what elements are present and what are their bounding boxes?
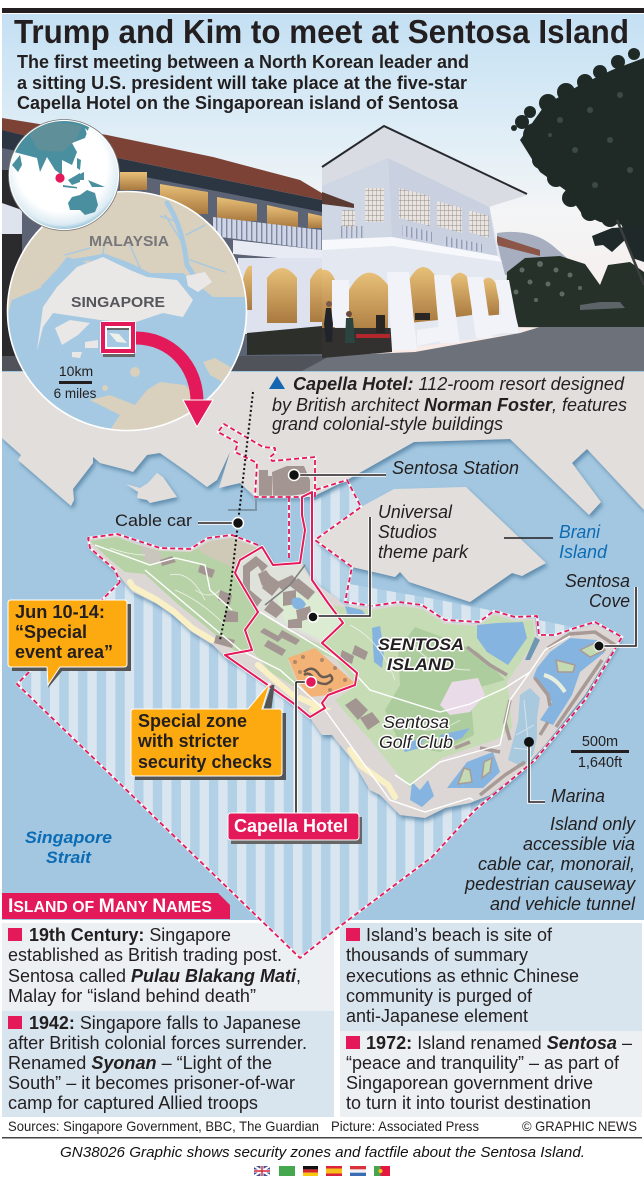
central golf dark green bbox=[385, 627, 505, 752]
panel: factfile 1942: South” – it becomes prisoner-of-war bbox=[8, 1072, 295, 1093]
Sentosa island bbox=[88, 535, 620, 818]
label: Cable car bbox=[115, 511, 244, 530]
title: Trump and Kim to meet at Sentosa Island bbox=[14, 13, 629, 50]
land masses bbox=[2, 372, 644, 602]
inlet bbox=[525, 637, 540, 660]
Capella Hotel description: Capella Hotel: 112-room resort designed bbox=[293, 374, 625, 394]
estate rows bbox=[455, 632, 615, 795]
tree canopy bbox=[511, 48, 644, 232]
label: Brani Island bbox=[504, 522, 608, 562]
west green bbox=[90, 537, 258, 652]
note: island access bbox=[464, 814, 636, 914]
label: Universal Studios: Studios bbox=[378, 522, 437, 542]
subtitle: Capella Hotel on the Singaporean island of Sentosa bbox=[17, 92, 459, 113]
label: Brani Island: Island bbox=[559, 542, 608, 562]
panel: factfile 1972: 1972: Island renamed Sentosa – bbox=[366, 1032, 633, 1053]
left small roof bbox=[322, 192, 354, 208]
subtitle: a sitting U.S. president will take place at the five-star bbox=[17, 72, 467, 93]
cable car line bbox=[220, 392, 253, 640]
callout: special event area: “Special bbox=[15, 622, 87, 642]
mainland Singapore bbox=[2, 372, 644, 515]
label: Marina bbox=[524, 737, 605, 806]
note: island access: and vehicle tunnel bbox=[490, 894, 636, 914]
label: Sentosa Island: SENTOSA bbox=[378, 635, 464, 654]
interior detail bbox=[376, 313, 430, 333]
upper railing lines bbox=[340, 225, 482, 252]
scale bar: island bbox=[571, 734, 629, 771]
panel: factfile 19th century: established as British trading post. bbox=[8, 944, 282, 965]
left wing columns and arches bbox=[238, 258, 322, 334]
location dot bbox=[55, 173, 65, 183]
label: Sentosa Cove: Cove bbox=[589, 591, 630, 611]
Malaysia land bbox=[8, 192, 245, 312]
panel: factfile 1942: after British colonial forces surrender. bbox=[8, 1032, 307, 1053]
label: Capella Hotel bbox=[228, 676, 362, 844]
trunk bbox=[617, 220, 644, 285]
left wing balustrade bbox=[2, 203, 322, 262]
panel: factfile beach executions: community is purged of bbox=[346, 985, 533, 1006]
special event area boundary bbox=[17, 424, 622, 958]
Johor strait and rivers bbox=[43, 203, 225, 287]
callout: special event area: event area” bbox=[15, 642, 113, 662]
left white margin bbox=[0, 0, 2, 1191]
sources bbox=[8, 1118, 637, 1134]
note: island access: cable car, monorail, bbox=[478, 854, 635, 874]
people bbox=[324, 301, 355, 343]
orange resort bbox=[288, 648, 357, 697]
label: Universal Studios: Universal bbox=[378, 502, 453, 522]
Capella Hotel description: grand colonial-style buildings bbox=[272, 414, 503, 434]
red carpet bbox=[356, 334, 390, 338]
scale bar: island: 500m bbox=[582, 734, 618, 750]
special event area stripes bbox=[17, 480, 622, 958]
label: Sentosa Station bbox=[288, 458, 519, 480]
label: Sentosa Island bbox=[378, 635, 464, 674]
east green bbox=[322, 605, 535, 788]
leaf speckle bbox=[548, 92, 633, 188]
island base bbox=[88, 535, 620, 818]
label: Brani Island: Brani bbox=[559, 522, 601, 542]
locator map: Singapore bbox=[0, 180, 250, 431]
roads bbox=[95, 545, 570, 812]
panel: factfile 1942: Renamed Syonan – “Light of the bbox=[8, 1052, 272, 1073]
label: Universal Studios bbox=[308, 502, 469, 622]
VivoCity buildings bbox=[259, 466, 310, 496]
panel: factfile 19th century: 19th Century: Singapore bbox=[29, 924, 231, 945]
ground bbox=[302, 327, 644, 371]
Singapore land bbox=[37, 257, 193, 350]
small island bbox=[126, 473, 177, 503]
lilac area bbox=[440, 678, 485, 715]
subtitle bbox=[17, 51, 469, 113]
panel: factfile beach executions: executions as ethnic Chinese bbox=[346, 965, 579, 986]
caption: GN38026 Graphic shows security zones and factfile about the Sentosa Island. bbox=[60, 1144, 585, 1161]
panel: factfile beach executions: Island’s beach is site of bbox=[366, 924, 553, 945]
sources: © GRAPHIC NEWS bbox=[522, 1118, 637, 1134]
main block roof bbox=[322, 126, 527, 207]
cable road bbox=[265, 565, 305, 605]
left wing wall bbox=[2, 130, 322, 356]
panel: factfile 1942: camp for captured Allied troops bbox=[8, 1092, 258, 1113]
cove islands bbox=[458, 642, 605, 784]
panel: factfile beach executions: thousands of summary bbox=[346, 944, 529, 965]
sources: Picture: Associated Press bbox=[331, 1118, 479, 1134]
callout: special event area: Jun 10-14: bbox=[15, 602, 105, 622]
panel: factfile 1972 bbox=[340, 1031, 642, 1117]
label: Sentosa Golf Club bbox=[379, 712, 453, 752]
label: Singapore Strait: Strait bbox=[46, 848, 92, 867]
subtitle: The first meeting between a North Korean leader and bbox=[17, 51, 469, 72]
label: Universal Studios: theme park bbox=[378, 542, 469, 562]
callout: special zone: security checks bbox=[138, 752, 272, 772]
panel: factfile 19th century: Sentosa called Pulau Blakang Mati, bbox=[8, 965, 301, 986]
panel: factfile beach executions: anti-Japanese element bbox=[346, 1005, 528, 1026]
map water bbox=[2, 371, 644, 920]
zone interior light bbox=[235, 550, 343, 643]
note: island access: Island only bbox=[550, 814, 636, 834]
callout: special zone: with stricter bbox=[137, 731, 239, 751]
lakes bbox=[292, 597, 605, 807]
left wing windows bbox=[120, 172, 322, 228]
scale bar: 10km bbox=[59, 363, 93, 379]
north tan area bbox=[197, 538, 255, 573]
marina bbox=[508, 688, 540, 767]
panel: factfile 1972: Singaporean government drive bbox=[346, 1072, 593, 1093]
panel: factfile 1942 bbox=[2, 1011, 334, 1117]
panel: factfile beach executions bbox=[340, 923, 642, 1031]
mainland pier bbox=[228, 497, 256, 510]
distant building bbox=[497, 232, 567, 275]
label: Marina: Marina bbox=[551, 786, 605, 806]
label: Sentosa Station: Sentosa Station bbox=[392, 458, 519, 478]
callout: special zone: Special zone bbox=[138, 711, 247, 731]
entrance floor shadow bbox=[322, 328, 392, 358]
Pulau Ubin bbox=[186, 272, 212, 292]
panel: factfile 1972: to turn it into tourist destination bbox=[346, 1092, 591, 1113]
Riau islands bbox=[90, 358, 232, 430]
arrow bbox=[136, 338, 213, 427]
language flags bbox=[254, 1166, 390, 1176]
photo: Capella Hotel bbox=[2, 14, 644, 372]
note: island access: accessible via bbox=[523, 834, 635, 854]
label: Singapore Strait bbox=[25, 828, 112, 867]
label: Sentosa Cove bbox=[565, 571, 636, 651]
flowering bush bbox=[505, 256, 644, 328]
label: Sentosa Golf Club: Sentosa bbox=[383, 712, 449, 732]
upper windows bbox=[342, 188, 489, 238]
callout: special zone bbox=[131, 683, 286, 780]
palm fronds bbox=[592, 226, 644, 262]
heading: Island of Many Names: ISLAND OF MANY NAMES bbox=[8, 896, 212, 917]
inset box bbox=[101, 322, 135, 357]
scale bar: 6 miles bbox=[54, 386, 97, 401]
label: Sentosa Cove: Sentosa bbox=[565, 571, 630, 591]
scale bar: island: 1,640ft bbox=[578, 755, 622, 771]
callout: special event area bbox=[8, 600, 131, 688]
hedge bbox=[247, 326, 322, 355]
locator globe bbox=[8, 115, 120, 230]
resort buildings bbox=[160, 556, 380, 730]
country labels: MALAYSIA bbox=[89, 233, 169, 250]
Brani Island bbox=[315, 487, 546, 602]
scale bar bbox=[54, 363, 97, 401]
lower zone green bbox=[245, 612, 340, 690]
main block wall bbox=[322, 158, 520, 350]
note: island access: pedestrian causeway bbox=[464, 874, 636, 894]
southern islets bbox=[55, 320, 98, 358]
grey patch west bbox=[140, 545, 165, 565]
Capella Hotel description bbox=[269, 374, 627, 434]
panel: factfile 19th century bbox=[2, 923, 334, 1011]
panel: factfile 1942: 1942: Singapore falls to Japanese bbox=[29, 1012, 301, 1033]
Capella Hotel description: by British architect Norman Foster, features bbox=[272, 395, 627, 415]
label: Cable car: Cable car bbox=[115, 511, 192, 530]
locator map: Singapore: SINGAPORE bbox=[71, 294, 165, 311]
resort detail bbox=[293, 655, 347, 692]
parked car bbox=[580, 302, 625, 310]
label: Sentosa Island: ISLAND bbox=[387, 655, 454, 674]
label: Sentosa Golf Club: Golf Club bbox=[379, 732, 453, 752]
piers bbox=[332, 272, 519, 350]
label: Singapore Strait: Singapore bbox=[25, 828, 112, 847]
panel: factfile 1972: “peace and tranquility” – as part of bbox=[346, 1052, 620, 1073]
top rule bbox=[2, 8, 644, 13]
label: Capella Hotel: Capella Hotel bbox=[234, 816, 348, 836]
left wing roof bbox=[2, 118, 330, 212]
ground floor arches bbox=[322, 267, 499, 328]
sources: Sources: Singapore Government, BBC, The Guardian bbox=[8, 1118, 319, 1134]
panel: factfile 19th century: Malay for “island behind death” bbox=[8, 985, 256, 1006]
special zone boundary bbox=[225, 492, 357, 717]
beaches bbox=[130, 582, 395, 797]
